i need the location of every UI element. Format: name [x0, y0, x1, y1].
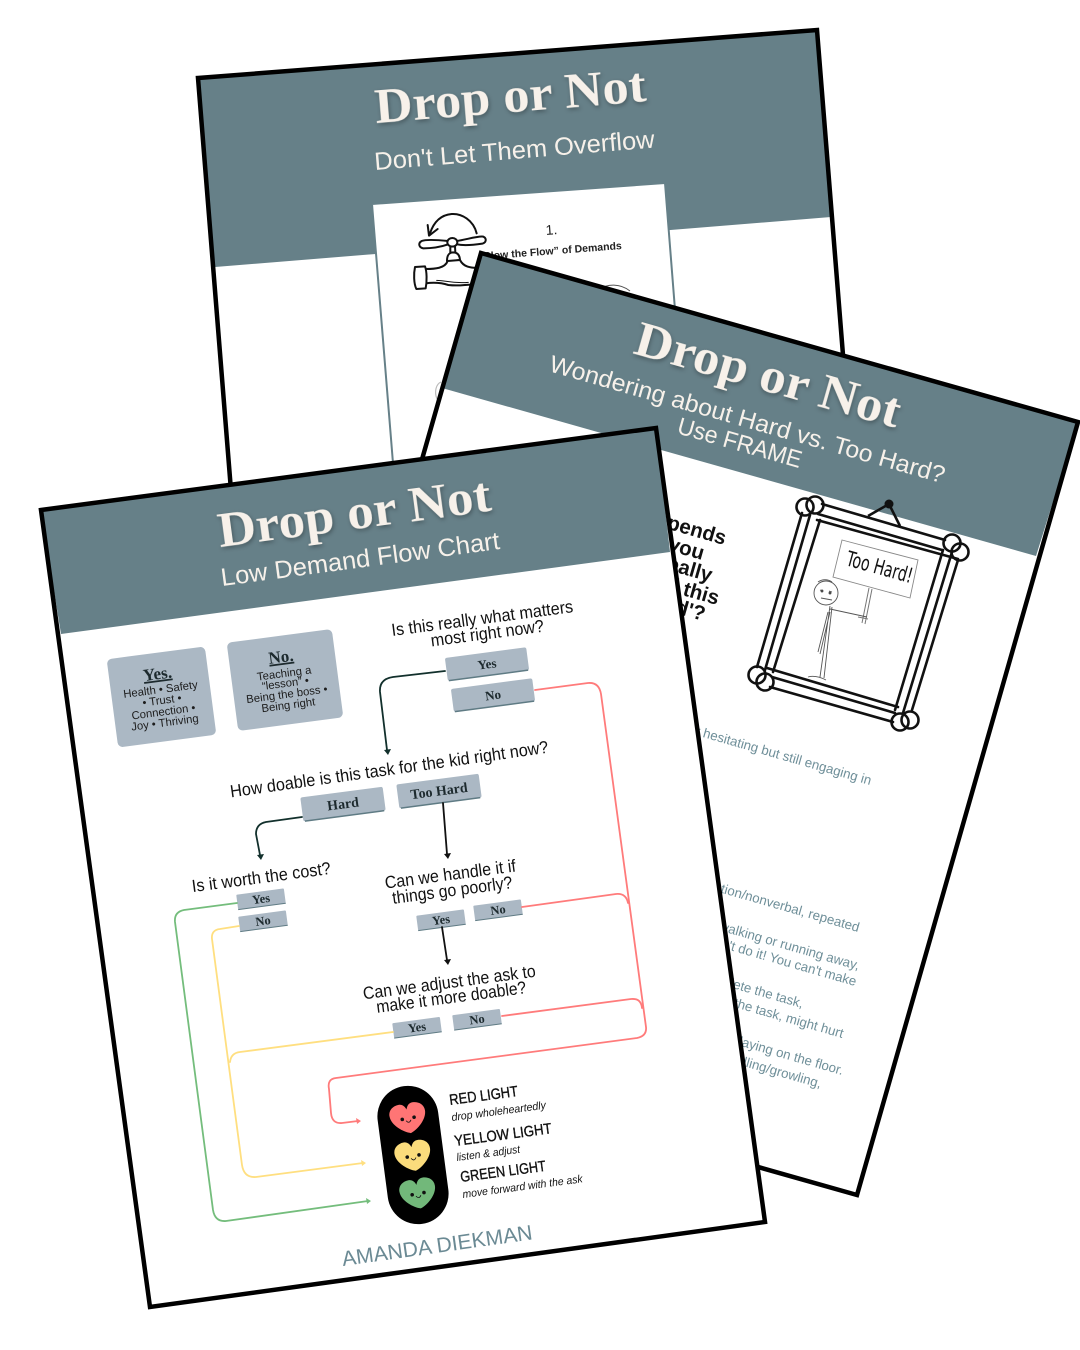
body text: teal notes: can't do it! You can't make: [706, 932, 858, 989]
button: Too Hard: Too Hard: [410, 781, 469, 803]
subtitle line 2: middle sheet: Use FRAME: [674, 413, 805, 474]
body text: teal notes: walking or running away,: [716, 918, 861, 973]
key: red light: RED LIGHT: [448, 1083, 519, 1109]
key: green light: [459, 1158, 584, 1201]
bold question text: Do you: [634, 524, 707, 565]
bold question text: find this: [639, 566, 722, 610]
question: really what matters: most right now?: [429, 616, 545, 650]
bold question text: hard'?: [642, 587, 708, 626]
key: yellow light: [453, 1120, 553, 1164]
author name: AMANDA DIEKMAN: [340, 1221, 534, 1271]
legend box: No: Being the boss •: [246, 684, 328, 706]
sign text: Too Hard!: [843, 547, 916, 588]
icon: faucet: [414, 214, 486, 289]
question: really what matters: Is this really what matters: [390, 596, 574, 640]
sign: [833, 540, 918, 598]
panel: middle sheet, Wondering about Hard vs. Too Hard: [260, 253, 1078, 1195]
step caption: “Slow the Flow” of Demands: [478, 240, 622, 263]
legend box: Yes: Connection •: [131, 702, 196, 723]
button: adjust Yes: [392, 1017, 442, 1038]
button: handle Yes: Yes: [431, 912, 451, 928]
arrow: green path to green light: [175, 903, 371, 1221]
arrow: yellow path to yellow light: [212, 926, 393, 1177]
key: red light: [448, 1083, 548, 1124]
legend box: Yes: Yes.: [142, 663, 173, 685]
legend box: Yes: Joy • Thriving: [131, 713, 199, 734]
subtitle line 1: middle sheet: Wondering about Hard vs. Too Hard?: [546, 351, 948, 489]
legend box: Yes: • Trust •: [142, 692, 182, 709]
question: how doable: How doable is this task for the kid right now?: [229, 737, 550, 801]
stick figure: [808, 580, 867, 680]
body text: teal notes: complete the task,: [697, 967, 805, 1011]
body text: teal notes: yelling/growling,: [728, 1050, 823, 1091]
button: cost Yes: [236, 888, 286, 910]
button: adjust No: [452, 1009, 502, 1030]
key: green light: GREEN LIGHT: [459, 1158, 547, 1186]
body text: teal notes: or hesitating but still engaging in: [687, 721, 873, 788]
question: handle it: [383, 856, 517, 908]
button: Hard: [300, 787, 386, 821]
subtitle: back sheet: Don't Let Them Overflow: [373, 125, 657, 176]
subtitle: front sheet: Low Demand Flow Chart: [219, 527, 501, 592]
back sheet border: [198, 30, 881, 878]
icon: green heart: [398, 1176, 439, 1212]
body text: teal notes: communication/nonverbal, repeated: [654, 862, 861, 935]
question: adjust the ask: [362, 961, 537, 1017]
button: Hard: Hard: [326, 795, 360, 815]
button: cost No: [238, 910, 288, 932]
icon: frame hanger: [868, 504, 900, 526]
button: handle No: No: [490, 902, 506, 918]
sign pole: [858, 588, 872, 624]
question: handle it: Can we handle it if: [383, 856, 517, 893]
panel: front sheet, Low Demand Flow Chart: [41, 428, 765, 1307]
button: Yes: Yes: [477, 655, 497, 673]
button: cost Yes: Yes: [251, 891, 271, 907]
icon: yellow heart: [393, 1138, 434, 1174]
illustration: framed stick figure holding sign: [748, 496, 968, 730]
button: No: No: [484, 687, 502, 703]
panel: back sheet, Don't Let Them Overflow: [198, 30, 881, 878]
question: handle it: things go poorly?: [391, 872, 514, 908]
button: Too Hard: [396, 774, 482, 808]
button: handle No: [473, 899, 523, 921]
icon: traffic light: [374, 1082, 452, 1228]
key: green light: move forward with the ask: [462, 1173, 584, 1201]
legend box: No: Teaching a: [256, 664, 313, 684]
front sheet border: [41, 428, 765, 1307]
button: adjust No: No: [469, 1012, 485, 1027]
button: cost No: No: [255, 913, 271, 929]
legend box: Yes: Health • Safety: [123, 679, 199, 701]
legend box: No: Being right: [261, 696, 317, 715]
title: back sheet: Drop or Not: [372, 56, 648, 134]
number 1: 1.: [545, 221, 558, 238]
legend box: No: [227, 629, 343, 731]
key: yellow light: YELLOW LIGHT: [453, 1120, 553, 1150]
bold question text: It depends: [624, 499, 729, 550]
question: adjust the ask: make it more doable?: [375, 977, 528, 1017]
button: adjust Yes: Yes: [407, 1019, 427, 1036]
button: handle Yes: [416, 909, 466, 931]
question: worth the cost: Is it worth the cost?: [191, 858, 332, 896]
icon: red heart: [388, 1100, 429, 1136]
bold question text: [624, 499, 729, 626]
legend box: Yes: [107, 646, 216, 748]
body text: teal notes: the task, might hurt: [732, 995, 846, 1041]
legend box: No: No.: [267, 646, 295, 668]
bold question text: really: [657, 550, 716, 587]
header band: front sheet: [41, 428, 670, 634]
body text: teal notes: [654, 721, 873, 1091]
key: yellow light: listen & adjust: [456, 1144, 522, 1164]
middle sheet border: [260, 253, 1078, 1195]
icon: peeking arc: [600, 285, 630, 291]
header band: back sheet: [198, 30, 831, 267]
question: adjust the ask: Can we adjust the ask to: [362, 961, 537, 1003]
frame: [748, 496, 968, 730]
body text: teal notes: laying on the floor.: [737, 1034, 845, 1078]
icon: peeking cup: [436, 382, 441, 399]
button: No: [451, 678, 535, 712]
inner white card: [372, 183, 690, 525]
key: red light: drop wholeheartedly: [451, 1099, 548, 1124]
header band: middle sheet: [442, 253, 1078, 556]
button: Yes: [445, 647, 529, 681]
title: middle sheet: Drop or Not: [629, 310, 908, 439]
legend box: No: “lesson” •: [261, 675, 310, 693]
arrow: red path to red light: [329, 683, 646, 1124]
title: front sheet: Drop or Not: [214, 466, 494, 558]
arrows: dark flow connectors: [256, 671, 451, 965]
